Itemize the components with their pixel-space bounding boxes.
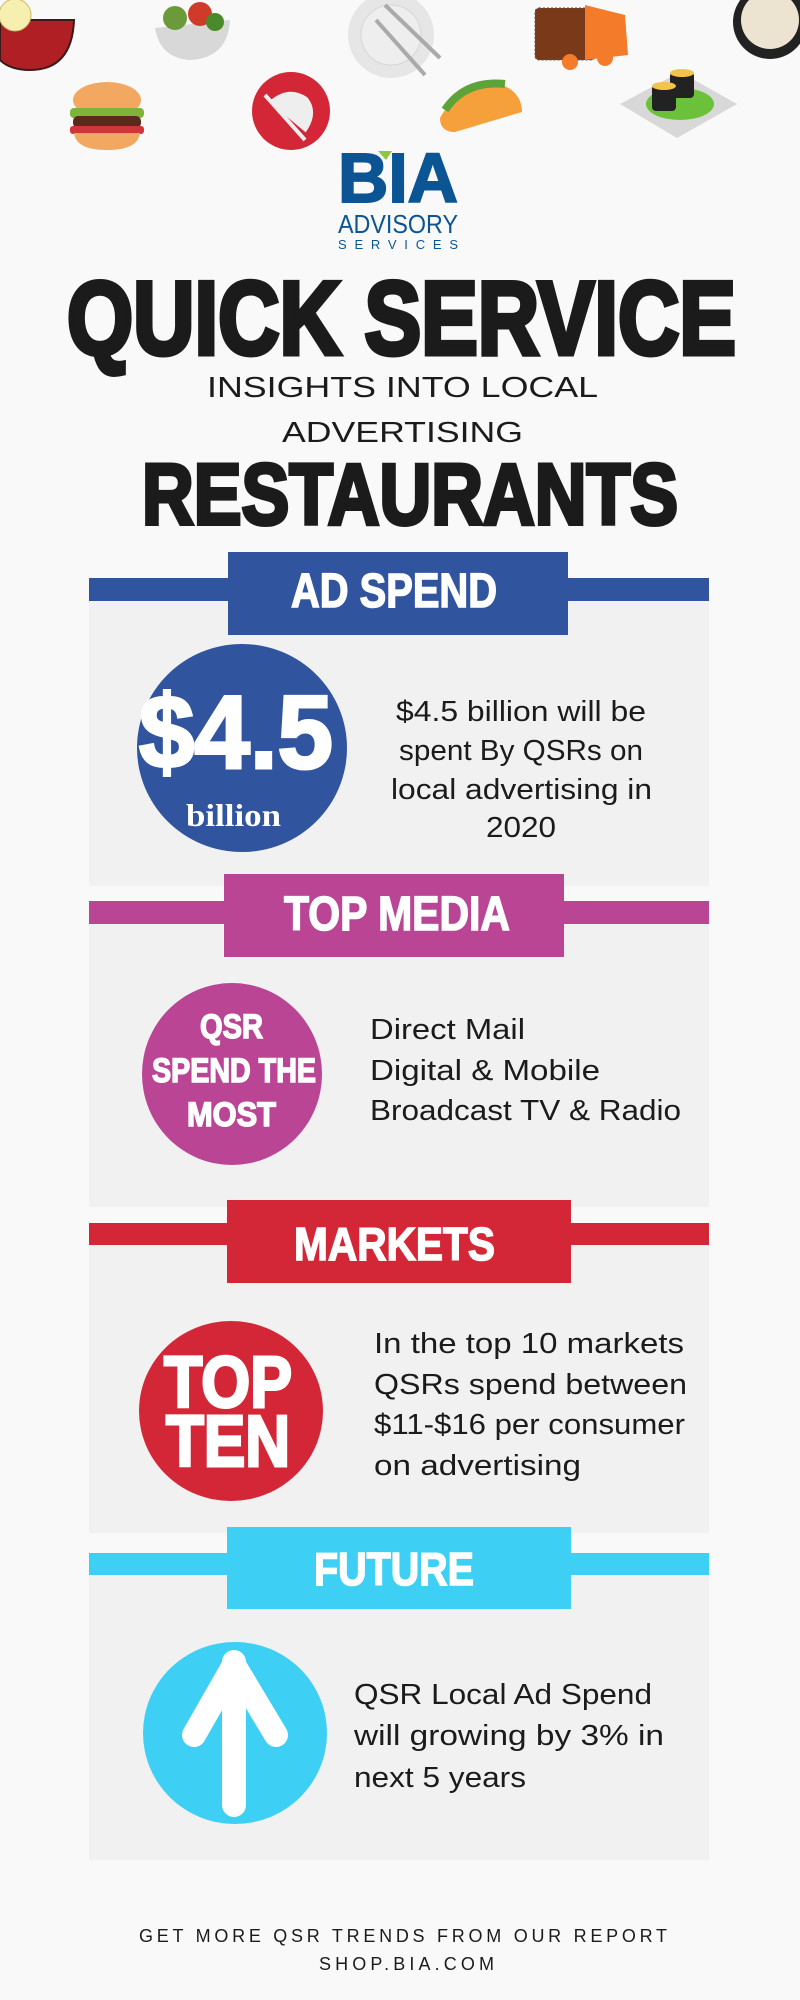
text: markets description: QSRs spend between: [374, 1369, 687, 1401]
panel: markets: [89, 1200, 709, 1533]
heading: ad spend: [228, 552, 568, 635]
logo: BIA Advisory Services: [338, 139, 458, 252]
text: ad spend description: [391, 696, 652, 844]
icon: up arrow circle: [143, 1642, 327, 1824]
heading: future: FUTURE: [314, 1543, 474, 1595]
logo: BIA Advisory Services: SERVICES: [338, 237, 458, 252]
icon: food truck: [535, 5, 628, 70]
icon: top ten circle: TEN: [166, 1402, 290, 1482]
text: future description: [353, 1679, 664, 1794]
icon: top ten circle: TOP: [164, 1343, 292, 1423]
heading: future: [227, 1527, 571, 1609]
subtitle: INSIGHTS INTO LOCAL: [207, 372, 598, 404]
icon: burger: [70, 82, 144, 150]
subtitle: [207, 372, 598, 449]
icon: $4.5 billion circle: $4.5: [139, 675, 333, 791]
icon: QSR spend the most circle: MOST: [187, 1096, 276, 1134]
panel: future: [89, 1527, 709, 1860]
text: markets description: In the top 10 markets: [374, 1328, 684, 1360]
icon: sushi plate: [620, 69, 737, 138]
title: RESTAURANTS: RESTAURANTS: [142, 447, 678, 543]
text: media list: [370, 1014, 681, 1127]
heading: top media: TOP MEDIA: [284, 888, 510, 941]
text: media list: Broadcast TV & Radio: [370, 1095, 681, 1127]
icon: QSR spend the most circle: SPEND THE: [152, 1052, 316, 1090]
icon: QSR spend the most circle: [142, 983, 322, 1165]
heading: markets: [227, 1200, 571, 1283]
icon: $4.5 billion circle: [137, 644, 347, 852]
text: ad spend description: spent By QSRs on: [399, 735, 643, 767]
logo: BIA Advisory Services: BIA: [338, 139, 458, 217]
icon: salad bowl: [155, 2, 230, 60]
icon: plate with cutlery: [348, 0, 440, 78]
text: future description: QSR Local Ad Spend: [354, 1679, 652, 1711]
heading: ad spend: AD SPEND: [291, 565, 497, 618]
text: future description: next 5 years: [354, 1762, 526, 1794]
text: ad spend description: $4.5 billion will be: [396, 696, 646, 728]
icon: rice bowl: [733, 0, 800, 59]
panel: top media: [89, 874, 709, 1207]
panel: ad spend: [89, 552, 709, 886]
text: markets description: on advertising: [374, 1450, 581, 1482]
icon: QSR spend the most circle: QSR: [200, 1008, 263, 1046]
text: media list: Direct Mail: [370, 1014, 525, 1046]
text: ad spend description: 2020: [486, 812, 556, 844]
footer: call to action: SHOP.BIA.COM: [319, 1954, 494, 1974]
text: ad spend description: local advertising in: [391, 774, 652, 806]
text: markets description: $11-$16 per consumer: [374, 1409, 685, 1441]
icon: top ten circle: [139, 1321, 323, 1501]
text: markets description: [374, 1328, 687, 1482]
icon: red cloche circle: [252, 72, 330, 150]
heading: markets: MARKETS: [294, 1218, 495, 1270]
icon: taco: [440, 84, 522, 132]
heading: top media: [224, 874, 564, 957]
subtitle: ADVERTISING: [282, 417, 523, 449]
footer: call to action: [139, 1926, 667, 1974]
logo: BIA Advisory Services: ADVISORY: [338, 209, 458, 239]
text: future description: will growing by 3% in: [353, 1720, 664, 1752]
icon: red noodle bowl: [0, 0, 74, 70]
text: media list: Digital & Mobile: [370, 1055, 600, 1087]
icon: $4.5 billion circle: billion: [186, 797, 281, 833]
footer: call to action: GET MORE QSR TRENDS FROM OUR REPORT: [139, 1926, 667, 1946]
